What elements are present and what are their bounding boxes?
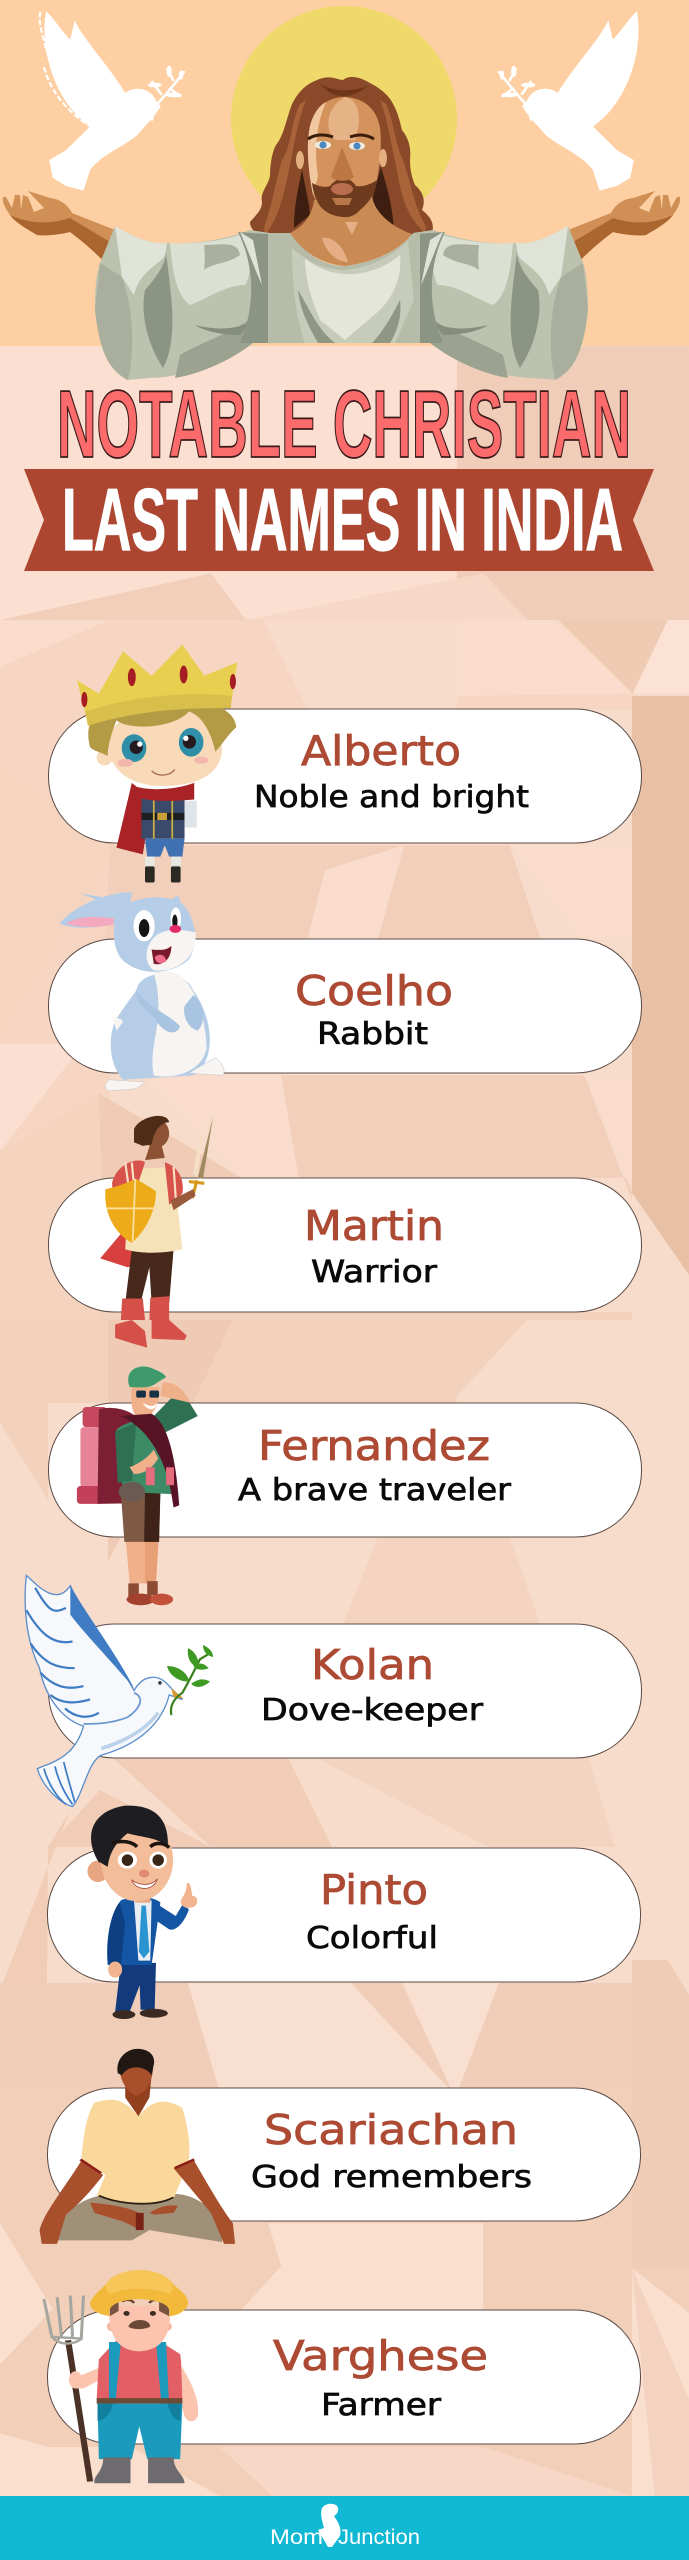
icon: mother and child xyxy=(318,2504,341,2547)
meaning: God remembers xyxy=(251,2160,532,2195)
icon: left white dove xyxy=(40,11,185,191)
name: Pinto xyxy=(320,1866,428,1914)
halo xyxy=(231,6,457,232)
logo: MomJunction: Junction xyxy=(338,2526,420,2549)
sky panel xyxy=(0,0,689,346)
meaning: Colorful xyxy=(306,1921,438,1956)
card: Martin xyxy=(48,1178,642,1312)
illustration: dove with olive branch xyxy=(25,1575,213,1807)
meaning: Warrior xyxy=(311,1255,438,1290)
illustration: hiker boots of warrior and hiker with backpack xyxy=(77,1320,198,1605)
name: Varghese xyxy=(273,2332,488,2380)
meaning: Noble and bright xyxy=(254,780,529,815)
name: Scariachan xyxy=(264,2106,518,2154)
name: Kolan xyxy=(311,1641,434,1689)
card: Pinto xyxy=(48,1848,640,1982)
logo: MomJunction xyxy=(270,2504,420,2549)
footer bar xyxy=(0,2496,689,2560)
meaning: Dove-keeper xyxy=(261,1693,484,1728)
illustration: blue rabbit xyxy=(59,892,224,1091)
name: Alberto xyxy=(301,727,461,775)
card: Coelho xyxy=(48,939,642,1073)
meaning: A brave traveler xyxy=(238,1473,512,1508)
card: Scariachan xyxy=(48,2088,640,2221)
name: Coelho xyxy=(295,967,453,1015)
meaning: Farmer xyxy=(321,2388,442,2423)
card: Varghese xyxy=(48,2310,640,2444)
illustration: man meditating xyxy=(40,2049,235,2244)
card: Kolan xyxy=(48,1624,642,1758)
card: Fernandez xyxy=(48,1403,642,1537)
illustration: farmer with pitchfork xyxy=(44,2270,198,2483)
icon: right white dove xyxy=(498,11,639,191)
name: Martin xyxy=(304,1202,444,1250)
illustration: warrior with sword and shield xyxy=(100,1116,213,1320)
illustration: businessman in blue suit xyxy=(87,1806,197,2019)
meaning: Rabbit xyxy=(317,1017,428,1052)
name: Fernandez xyxy=(258,1422,490,1470)
logo: MomJunction: Mom xyxy=(270,2526,323,2549)
card: Alberto xyxy=(48,709,642,843)
illustration: crowned boy xyxy=(77,645,237,882)
illustration: Jesus with open arms xyxy=(3,77,680,380)
